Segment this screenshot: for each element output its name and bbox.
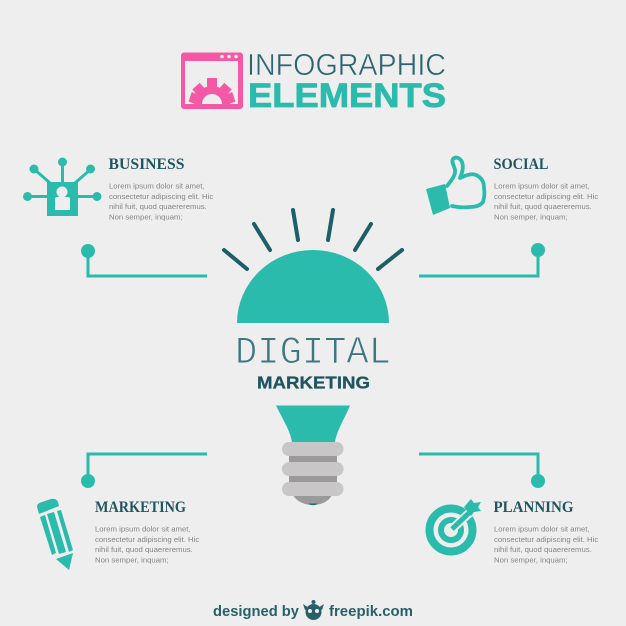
title: marketing: MARKETING bbox=[257, 372, 370, 392]
title: infographic: INFOGRAPHIC bbox=[247, 47, 446, 82]
text block: business: Non semper, inquam; bbox=[109, 212, 183, 222]
icon: browser window with gear bbox=[181, 52, 243, 109]
text block: business: Lorem ipsum dolor sit amet, bbox=[109, 182, 205, 190]
text block: business: consectetur adipiscing elit. Hic bbox=[109, 192, 213, 201]
connector: social bbox=[419, 243, 545, 276]
heading: planning: PLANNING bbox=[494, 499, 574, 516]
text block: marketing: nihil fuit, quod quaereremus. bbox=[95, 545, 193, 554]
text block: planning: consectetur adipiscing elit. Hic bbox=[494, 535, 598, 544]
bulb neck bbox=[276, 406, 350, 442]
footer: freepik.com: freepik.com bbox=[329, 604, 413, 620]
text block: planning: Non semper, inquam; bbox=[494, 556, 568, 564]
connector: business bbox=[81, 244, 207, 276]
text block: social: nihil fuit, quod quaereremus. bbox=[494, 202, 592, 211]
bulb rays bbox=[224, 210, 402, 269]
text block: social: Non semper, inquam; bbox=[494, 212, 568, 222]
text block: social: Lorem ipsum dolor sit amet, bbox=[494, 182, 590, 190]
text block: social: consectetur adipiscing elit. Hic bbox=[494, 192, 598, 201]
bulb dome bbox=[237, 250, 389, 323]
bulb base bbox=[282, 442, 344, 505]
heading: business: BUSINESS bbox=[108, 156, 184, 173]
connector: marketing bbox=[81, 454, 207, 488]
heading: marketing: MARKETING bbox=[95, 499, 186, 516]
title: digital: DIGITAL bbox=[235, 331, 391, 375]
footer: designed by: designed by bbox=[213, 604, 299, 620]
text block: business: nihil fuit, quod quaereremus. bbox=[109, 202, 207, 211]
icon: thumbs up bbox=[426, 158, 484, 215]
icon: business network bbox=[23, 158, 102, 216]
icon: pencil bbox=[37, 499, 73, 570]
icon: target with arrow bbox=[430, 499, 481, 552]
text block: marketing: Lorem ipsum dolor sit amet, bbox=[95, 524, 191, 534]
text block: planning: nihil fuit, quod quaereremus. bbox=[494, 545, 592, 554]
text block: marketing: Non semper, inquam; bbox=[95, 556, 169, 564]
heading: social: SOCIAL bbox=[494, 156, 548, 173]
icon: freepik logo bbox=[303, 600, 324, 620]
title: elements: ELEMENTS bbox=[248, 77, 446, 115]
text block: planning: Lorem ipsum dolor sit amet, bbox=[494, 524, 590, 534]
text block: marketing: consectetur adipiscing elit. Hic bbox=[95, 535, 199, 544]
connector: planning bbox=[419, 454, 545, 488]
